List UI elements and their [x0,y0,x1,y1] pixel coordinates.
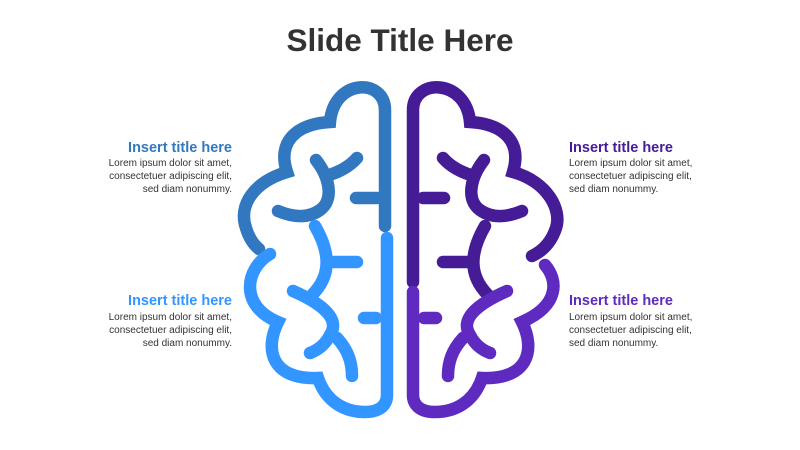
text: sed diam nonummy. [569,338,658,349]
text block: bottom right [569,293,692,349]
text block: top left [109,140,232,195]
right top lobe [413,87,557,295]
text: Insert title here [569,293,673,309]
text: sed diam nonummy. [569,184,658,195]
text: Insert title here [128,293,232,309]
text: Lorem ipsum dolor sit amet, [109,158,232,169]
text: consectetuer adipiscing elit, [109,325,232,336]
text block: bottom left [109,293,232,349]
text: consectetuer adipiscing elit, [569,325,692,336]
text: Lorem ipsum dolor sit amet, [569,158,692,169]
text: Insert title here [128,140,232,156]
text: Lorem ipsum dolor sit amet, [109,312,232,323]
title: Slide Title Here [286,22,514,58]
text: Insert title here [569,140,673,156]
text: consectetuer adipiscing elit, [569,171,692,182]
text: sed diam nonummy. [143,184,232,195]
left bottom lobe [250,226,387,412]
right bottom lobe [413,265,553,412]
left top lobe [244,87,385,249]
text: consectetuer adipiscing elit, [109,171,232,182]
text block: top right [569,140,692,195]
text: sed diam nonummy. [143,338,232,349]
text: Lorem ipsum dolor sit amet, [569,312,692,323]
